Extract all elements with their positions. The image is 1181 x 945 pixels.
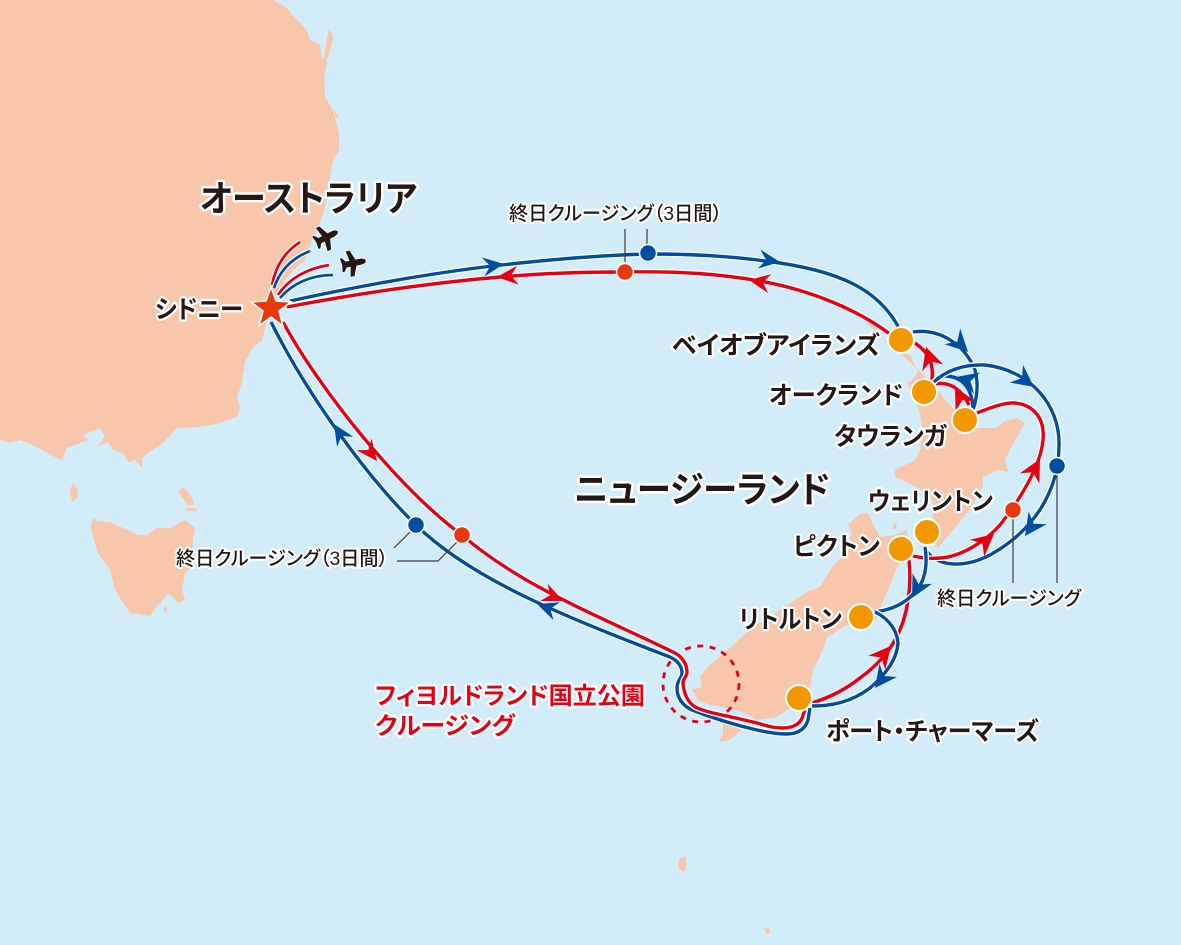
landmass: Fraser Island sliver [323, 28, 339, 118]
label: Auckland: オークランド [769, 382, 903, 410]
label: full-day cruising, Tasman outbound: 終日クルージング（3日間） [509, 203, 722, 225]
label: Fiordland National Park cruising: フィヨルドランド国立公園 [375, 683, 645, 710]
label: Tauranga: タウランガ [834, 423, 948, 451]
heading: Australia: オーストラリア [200, 178, 417, 219]
label: Fiordland National Park cruising [375, 683, 645, 740]
leader lines for full-day cruising [394, 229, 1057, 583]
icon: airplane 2 [339, 248, 368, 278]
route: Sydney – Bay of Islands (outbound blue and return red) [287, 254, 900, 338]
fjordland park dashed circle [663, 646, 739, 722]
label: Port Chalmers: ポート・チャーマーズ [826, 717, 1039, 746]
sea-day markers [408, 244, 1066, 544]
port markers [786, 327, 978, 711]
heading: New Zealand: ニュージーランド [574, 469, 830, 510]
label: Wellington: ウェリントン [868, 488, 993, 516]
label: Lyttelton: リトルトン [739, 606, 842, 634]
label: Bay of Islands: ベイオブアイランズ [672, 331, 880, 360]
direction arrows [326, 250, 1050, 695]
landmass: Tasmania [70, 483, 197, 616]
landmass: New Zealand North Island [863, 319, 1025, 549]
landmass: New Zealand South Island [678, 513, 909, 934]
label: full-day cruising, Tasman return: 終日クルージング（3日間） [176, 548, 388, 570]
label: Fiordland National Park cruising: クルージング [375, 712, 516, 740]
label: Picton: ピクトン [793, 533, 880, 561]
icon: airplane 1 [310, 220, 344, 254]
route: New Zealand coastal loops [812, 331, 1059, 706]
flight lines from Sydney [272, 242, 333, 298]
icon: Sydney star [251, 287, 291, 326]
label: full-day cruising, Cook Strait area: 終日クルージング [937, 588, 1082, 610]
label: Sydney: シドニー [155, 296, 243, 324]
landmass: Australia [0, 0, 339, 468]
route: Sydney – Fiordland – Port Chalmers [271, 322, 810, 734]
